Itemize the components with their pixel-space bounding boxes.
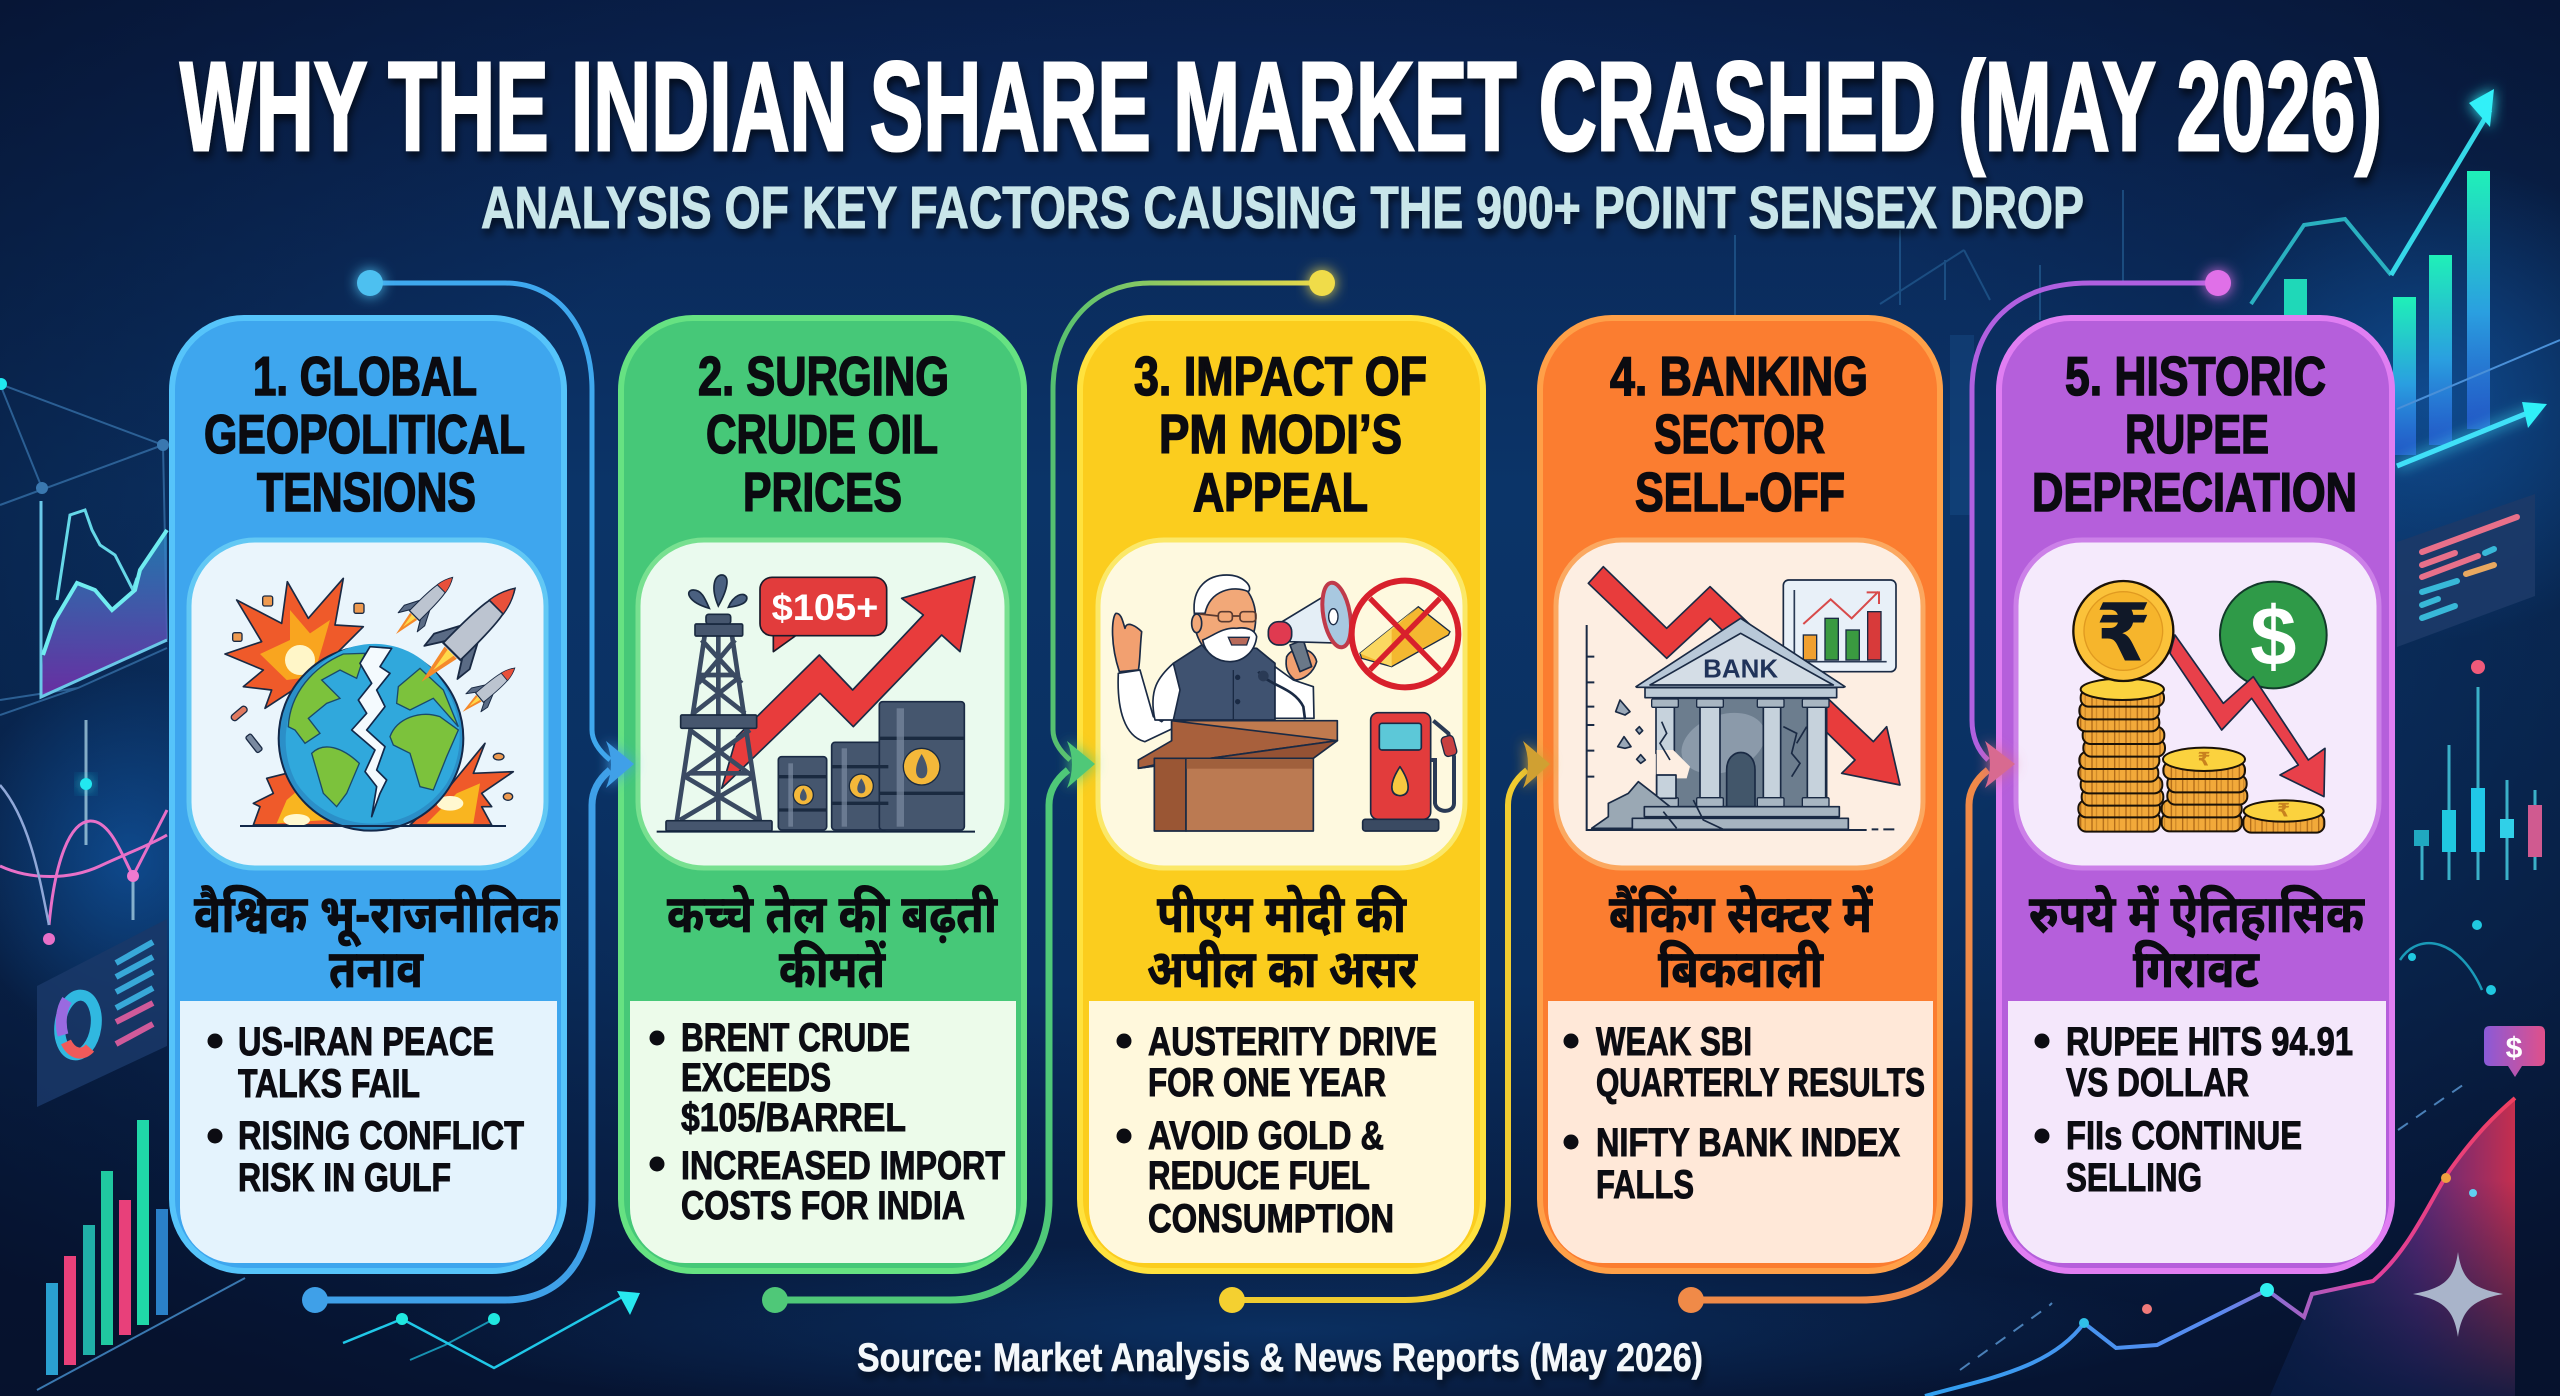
decoration: left dashboard panel bbox=[37, 919, 167, 1107]
image box: card 5 bbox=[2016, 540, 2379, 868]
bullet box: card 1: TALKS FAIL bbox=[238, 1062, 420, 1106]
heading: card 3: 3. IMPACT OF bbox=[1134, 345, 1427, 407]
bullet box: card 5: FIIs CONTINUE bbox=[2066, 1114, 2302, 1158]
heading: card 4: SELL-OFF bbox=[1635, 461, 1845, 523]
decoration: bottom zigzag arrow bbox=[343, 1291, 640, 1368]
panel: 1 global geopolitical tensions bbox=[172, 318, 564, 1271]
bullet box: card 4 bbox=[1548, 1001, 1933, 1263]
heading: card 5: DEPRECIATION bbox=[2032, 461, 2357, 523]
bullet box: card 1 bbox=[180, 1001, 557, 1263]
decoration: top right bars and arrow bbox=[1735, 89, 2560, 515]
connector: blue bottom bbox=[302, 770, 610, 1313]
text: hindi card 2: कच्चे तेल की बढ़ती bbox=[667, 885, 998, 944]
connector: green-yellow top bbox=[1053, 270, 1335, 760]
icon: oil derrick, rising arrow and barrels bbox=[657, 575, 975, 832]
bullet box: card 5 bbox=[2008, 1001, 2386, 1263]
sparkle star bbox=[2413, 1252, 2503, 1337]
icon: dollar badge: $ bbox=[2506, 1032, 2523, 1065]
bullet box: card 2: EXCEEDS bbox=[681, 1056, 831, 1100]
bullet box: card 4: NIFTY BANK INDEX bbox=[1596, 1121, 1900, 1165]
bullet box: card 2 bbox=[630, 1001, 1016, 1263]
text: hindi card 3: अपील का असर bbox=[1147, 941, 1418, 999]
connector: orange bottom bbox=[1678, 770, 1988, 1313]
connector: green bottom bbox=[762, 770, 1068, 1313]
bullet box: card 2: $105/BARREL bbox=[681, 1096, 906, 1140]
heading: card 3: PM MODI’S bbox=[1159, 403, 1402, 465]
icon: rupee coins, dollar coin and falling arrow: ₹ bbox=[2096, 589, 2151, 678]
heading: card 1: GEOPOLITICAL bbox=[204, 403, 525, 465]
icon: cracked globe with explosions and rockets bbox=[225, 567, 533, 831]
bullet box: card 4: QUARTERLY RESULTS bbox=[1596, 1061, 1925, 1105]
text: hindi card 5: गिरावट bbox=[2133, 941, 2260, 999]
heading: card 5 bbox=[2032, 345, 2357, 523]
icon: oil derrick, rising arrow and barrels: $105+ bbox=[772, 586, 878, 628]
heading: card 2 bbox=[698, 345, 949, 523]
heading: card 5: 5. HISTORIC bbox=[2065, 345, 2326, 407]
bullet box: card 5: RUPEE HITS 94.91 bbox=[2066, 1020, 2353, 1064]
connector: blue top bbox=[357, 270, 610, 760]
text: hindi card 4: बैंकिंग सेक्टर में bbox=[1609, 885, 1873, 944]
heading: card 2: PRICES bbox=[743, 461, 902, 523]
heading: card 4: 4. BANKING bbox=[1610, 345, 1868, 407]
panel: 2 surging crude oil prices bbox=[621, 318, 1024, 1271]
text: hindi card 1: तनाव bbox=[329, 941, 424, 999]
bullet box: card 1: RISK IN GULF bbox=[238, 1156, 451, 1200]
bullet box: card 2: BRENT CRUDE bbox=[681, 1016, 910, 1060]
bullet box: card 3: CONSUMPTION bbox=[1148, 1197, 1394, 1241]
icon: crumbling bank with falling arrow: BANK bbox=[1703, 653, 1778, 683]
text: hindi card 4: बिकवाली bbox=[1658, 941, 1824, 999]
icon: crumbling bank with falling arrow bbox=[1587, 567, 1900, 830]
bullet box: card 3: REDUCE FUEL bbox=[1148, 1154, 1370, 1198]
heading: card 1: 1. GLOBAL bbox=[253, 345, 477, 407]
image box: card 3 bbox=[1098, 540, 1465, 868]
bullet box: card 1: US-IRAN PEACE bbox=[238, 1020, 494, 1064]
text: hindi card 3: पीएम मोदी की bbox=[1157, 885, 1407, 944]
panel: 5 historic rupee depreciation bbox=[1999, 318, 2392, 1271]
icon: leader at podium with megaphone, no gold sign and fuel pump bbox=[1113, 575, 1458, 831]
bullet box: card 5: VS DOLLAR bbox=[2066, 1061, 2249, 1105]
heading: card 1 bbox=[204, 345, 525, 523]
arrow: green bbox=[1067, 741, 1095, 788]
bullet box: card 3: FOR ONE YEAR bbox=[1148, 1061, 1386, 1105]
text: hindi card 1: वैश्विक भू-राजनीतिक bbox=[194, 886, 560, 947]
icon: rupee coins, dollar coin and falling arrow: $ bbox=[2250, 590, 2297, 683]
image box: card 2 bbox=[638, 540, 1007, 868]
icon: dollar badge bbox=[2484, 1026, 2545, 1077]
icon: rupee coins, dollar coin and falling arrow: ₹ bbox=[2198, 748, 2211, 769]
heading: card 2: CRUDE OIL bbox=[706, 403, 938, 465]
decoration: left line chart bbox=[0, 378, 169, 715]
decoration: right dashboard panel bbox=[2397, 494, 2535, 647]
heading: card 2: 2. SURGING bbox=[698, 345, 949, 407]
decoration: bottom right curve chart bbox=[1925, 1026, 2545, 1396]
image box: card 1 bbox=[189, 540, 546, 868]
bullet box: card 5: SELLING bbox=[2066, 1156, 2202, 1200]
heading: card 3 bbox=[1134, 345, 1427, 523]
bullet box: card 3: AUSTERITY DRIVE bbox=[1148, 1020, 1437, 1064]
bullet box: card 3 bbox=[1089, 1001, 1474, 1263]
heading: card 5: RUPEE bbox=[2125, 403, 2269, 465]
arrow: blue bbox=[606, 741, 634, 788]
decoration: left pink wave chart bbox=[0, 720, 167, 945]
source line: Source: Market Analysis & News Reports (May 2026) bbox=[857, 1336, 1703, 1380]
decoration: left bar chart bbox=[37, 1120, 245, 1390]
icon: rupee coins, dollar coin and falling arrow bbox=[2073, 581, 2327, 833]
connector: purple top bbox=[1972, 270, 2231, 760]
panel: 4 banking sector sell-off bbox=[1540, 318, 1940, 1271]
text: hindi card 2 bbox=[667, 885, 998, 999]
text: hindi card 3 bbox=[1147, 885, 1418, 999]
text: hindi card 1 bbox=[194, 886, 560, 999]
icon: rupee coins, dollar coin and falling arrow: ₹ bbox=[2277, 800, 2290, 821]
text: hindi card 5 bbox=[2029, 885, 2365, 999]
bullet box: card 1: RISING CONFLICT bbox=[238, 1114, 524, 1158]
text: hindi card 2: कीमतें bbox=[779, 940, 886, 999]
arrow: pink-orange bbox=[1985, 741, 2015, 788]
connector: yellow bottom bbox=[1219, 770, 1527, 1313]
bullet box: card 4: FALLS bbox=[1596, 1163, 1694, 1207]
heading: card 3: APPEAL bbox=[1193, 461, 1368, 523]
bullet box: card 3: AVOID GOLD & bbox=[1148, 1114, 1384, 1158]
heading: card 1: TENSIONS bbox=[257, 461, 476, 523]
subtitle: ANALYSIS OF KEY FACTORS CAUSING THE 900+ POINT SENSEX DROP bbox=[481, 175, 2084, 241]
arrow: gold bbox=[1523, 741, 1550, 788]
bullet box: card 2: INCREASED IMPORT bbox=[681, 1144, 1005, 1188]
text: hindi card 4 bbox=[1609, 885, 1873, 999]
image box: card 4 bbox=[1556, 540, 1923, 868]
panel: 3 impact of pm modi's appeal bbox=[1080, 318, 1483, 1271]
bullet box: card 4: WEAK SBI bbox=[1596, 1020, 1752, 1064]
bullet box: card 2: COSTS FOR INDIA bbox=[681, 1184, 965, 1228]
heading: card 4 bbox=[1610, 345, 1868, 523]
text: hindi card 5: रुपये में ऐतिहासिक bbox=[2029, 885, 2365, 944]
heading: card 4: SECTOR bbox=[1654, 403, 1825, 465]
decoration: right candlesticks bbox=[2400, 660, 2542, 995]
